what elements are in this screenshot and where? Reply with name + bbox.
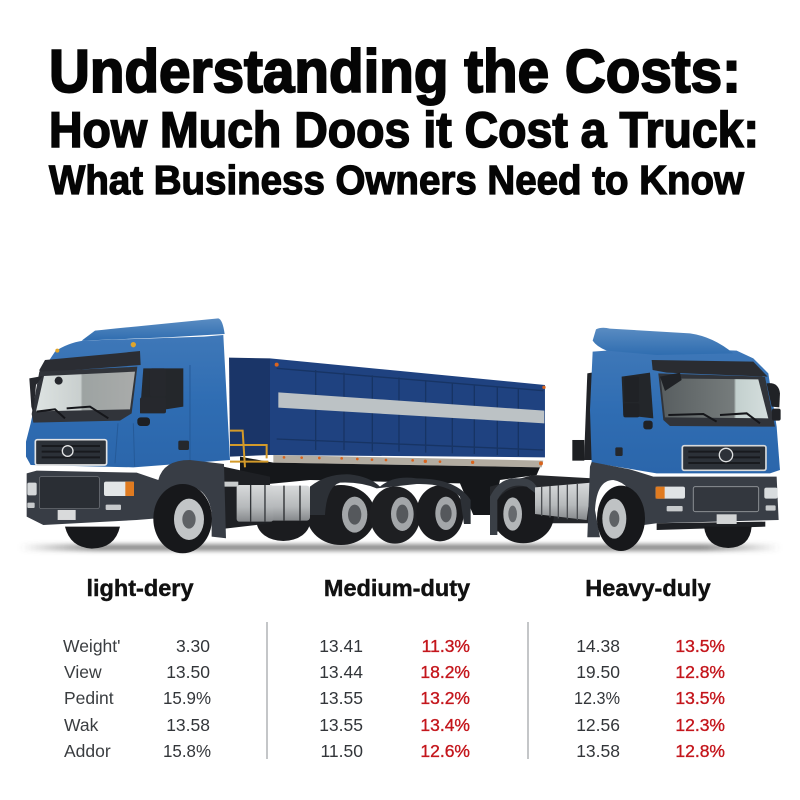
storage box [572,440,584,461]
visor [652,360,768,377]
heavy-duty percentages: 12.3% [675,715,725,735]
lower grille [39,477,99,509]
light-duty row labels: Pedint [64,688,114,708]
side mirrors [29,368,166,426]
light-duty values [163,636,211,761]
ground shadow [20,544,780,551]
heavy-duty values: 19.50 [576,662,620,682]
trailer marker lights [275,363,546,465]
light-duty values: 13.58 [166,715,210,735]
chassis [240,457,540,515]
windshield frame [32,367,137,423]
rear wheel [493,487,554,543]
fuel tank [223,482,273,522]
medium-duty values: 13.44 [319,662,363,682]
arch and bumper [587,462,779,537]
grille [35,440,107,465]
exhaust stack [584,372,597,460]
title line 3: What Business Owners Need to Know [49,157,744,203]
chassis behind cab [213,467,270,530]
side mirror [623,373,781,429]
front far wheel [65,527,120,549]
headlights [656,487,778,511]
column header: light-duty: light-dery [86,575,194,601]
medium-duty values [319,636,363,761]
windshield [661,378,768,418]
cab body [590,347,780,473]
windshield frame [658,373,775,427]
trailer box [270,358,545,457]
right truck [490,328,781,551]
light-duty values: 15.8% [163,741,211,761]
heavy-duty percentages: 12.8% [675,741,725,761]
column divider right [527,622,529,759]
medium-duty percentages: 13.2% [420,688,470,708]
title [49,38,759,203]
heavy-duty percentages: 13.5% [675,636,725,656]
light-duty values: 15.9% [163,688,211,708]
medium-duty percentages: 18.2% [420,662,470,682]
wheel arch and bumper [27,460,226,538]
medium-duty percentages: 11.3% [422,636,470,656]
heavy-duty percentages: 12.8% [675,662,725,682]
door handle [178,441,189,450]
heavy-duty percentages [675,636,725,761]
trailer panel lines [277,368,543,456]
bumper lower [657,522,765,530]
license plate [717,514,737,524]
trailer wheels [257,485,464,545]
license plate [58,510,76,520]
title line 2: How Much Doos it Cost a Truck: [49,102,759,158]
heavy-duty values [574,636,620,761]
trailer stripe [278,392,544,423]
trailer lower rail [273,455,543,467]
yellow rail [230,431,268,467]
visor [39,351,141,373]
front left wheel [597,486,645,551]
heavy-duty percentages: 13.5% [675,688,725,708]
front wheel [153,484,212,553]
grille [682,446,766,470]
medium-duty percentages: 13.4% [420,715,470,735]
medium-duty values: 13.55 [319,715,363,735]
heavy-duty values: 13.58 [576,741,620,761]
light-duty row labels: Wak [64,715,99,735]
side window [140,368,183,413]
column header: heavy-duty: Heavy-duly [585,575,711,601]
light-duty row labels: View [64,662,102,682]
side window [622,373,653,418]
light-duty row labels: Weight' [63,636,120,656]
windshield [36,372,135,411]
column divider left [266,622,268,759]
medium-duty values: 13.55 [319,688,363,708]
medium-duty percentages: 12.6% [420,741,470,761]
door seam [115,365,190,467]
title line 1: Understanding the Costs: [49,38,741,105]
heavy-duty values: 14.38 [576,636,620,656]
fuel tank [535,483,592,520]
left truck [26,318,273,553]
front right wheel [704,527,752,548]
roof fairing [593,328,733,355]
medium-duty values: 11.50 [320,741,363,761]
heavy-duty values: 12.56 [576,715,620,735]
headlights [27,482,134,510]
heavy-duty values: 12.3% [574,688,620,708]
lower grille [693,487,759,512]
rear mudguards [310,474,471,524]
trailer [229,358,546,545]
light-duty values: 13.50 [166,662,210,682]
trailer front section [229,358,270,457]
cab door detail [615,447,623,456]
light-duty row labels: Addor [64,741,111,761]
fuel tanks [240,486,310,521]
medium-duty values: 13.41 [319,636,363,656]
amber lights [55,342,136,353]
column header: medium-duty: Medium-duty [324,575,470,601]
roof fairing [82,318,225,341]
medium-duty percentages [420,636,470,761]
rear mudguard [490,478,540,535]
wipers [37,407,108,418]
wipers [668,413,760,423]
chassis [490,475,593,533]
light-duty row labels [63,636,120,761]
cab body [26,335,230,467]
light-duty values: 3.30 [176,636,210,656]
